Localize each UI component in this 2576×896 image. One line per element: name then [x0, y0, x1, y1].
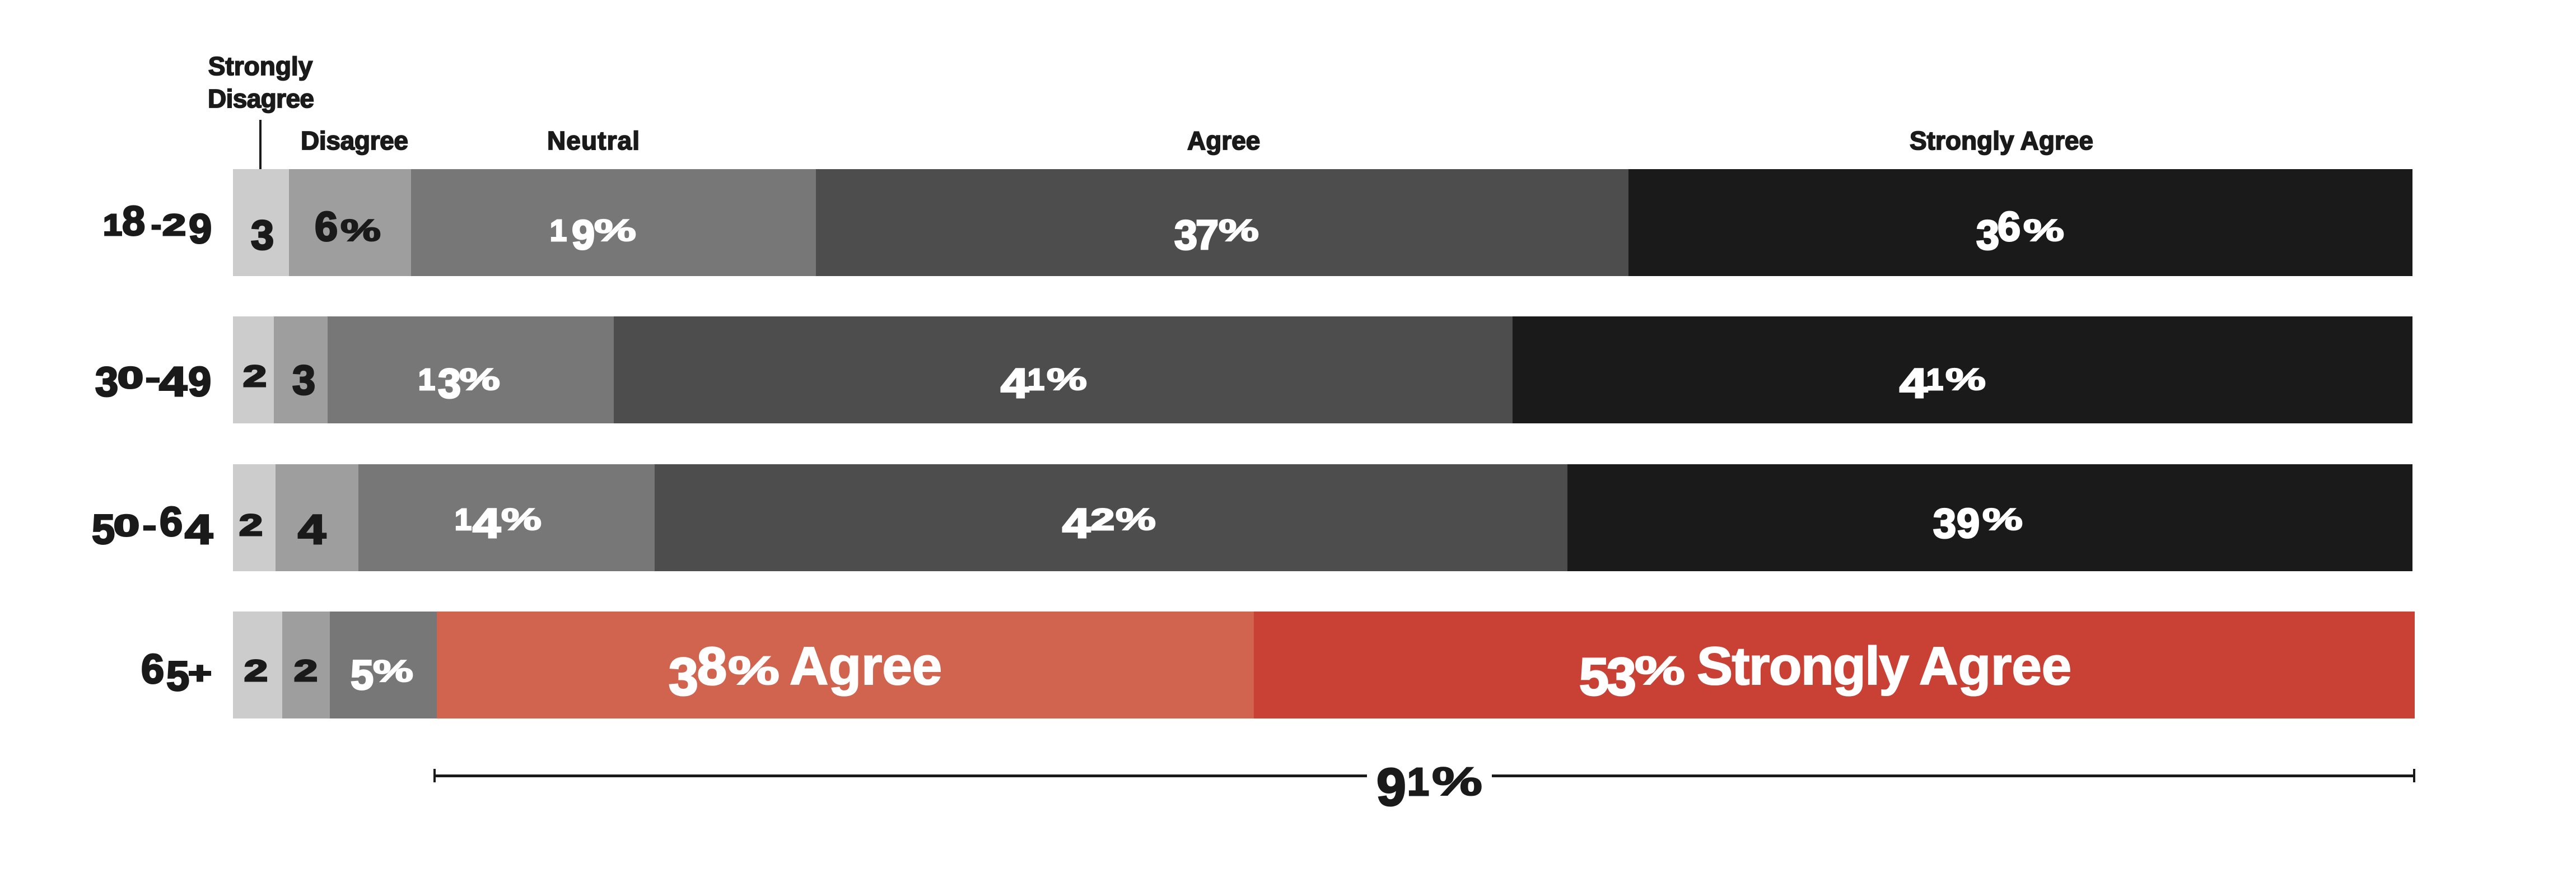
value 19%: 1 [550, 214, 567, 248]
age label 50-64: 6 [160, 498, 183, 545]
value 42%: 2 [1091, 503, 1114, 536]
value 2: 2 [243, 360, 267, 393]
value 36%: % [2023, 213, 2064, 248]
bracket line right [1492, 774, 2415, 777]
value 41%: 1 [1926, 363, 1943, 396]
bracket tick left [433, 769, 436, 782]
value 19%: % [594, 213, 636, 248]
age label 18-29: 2 [162, 208, 186, 242]
age label 50-64: 5 [92, 506, 115, 553]
row: 65+ (highlighted) [141, 612, 2415, 718]
age label 30-49: 4 [159, 358, 187, 405]
segment: neutral 5% [330, 612, 437, 718]
segment: strongly agree 53% [1254, 612, 2415, 718]
heading: neutral: Neutral [547, 126, 640, 155]
segment: disagree 4 [276, 464, 358, 571]
age label 18-29: 9 [189, 206, 212, 252]
value 39%: % [1982, 502, 2023, 536]
value 13%: % [459, 362, 500, 396]
value 41%: 1 [1028, 363, 1044, 396]
value 13%: 1 [418, 363, 435, 396]
segment: strongly disagree 2 [233, 316, 274, 423]
segment: strongly agree 41% [1513, 316, 2412, 423]
value 53% Strongly Agree: Agree [1919, 636, 2071, 696]
value 14%: 1 [455, 503, 472, 536]
value 2: 2 [294, 654, 318, 688]
value 5%: 5 [351, 652, 374, 698]
age label 18-29: 8 [122, 198, 145, 244]
value 13%: 3 [438, 360, 461, 407]
value 37%: 3 [1174, 212, 1197, 258]
segment: strongly disagree 2 [233, 464, 276, 571]
value 2: 2 [239, 508, 263, 542]
value 41%: 4 [1001, 360, 1029, 407]
age label 50-64: 4 [185, 506, 213, 553]
column headings [208, 52, 2093, 170]
heading: agree: Agree [1187, 126, 1260, 155]
segment: strongly agree 36% [1628, 169, 2412, 276]
value 38% Agree: Agree [790, 636, 942, 696]
segment: strongly agree 39% [1567, 464, 2412, 571]
total 91%: 9 [1376, 758, 1406, 817]
segment: agree 37% [816, 169, 1628, 276]
value 53% Strongly Agree: % [1635, 649, 1685, 693]
value 3: 3 [251, 212, 274, 258]
bracket line left [434, 774, 1367, 777]
value 5%: % [373, 654, 413, 688]
value 37%: % [1219, 213, 1259, 248]
value 36%: 6 [1998, 203, 2020, 250]
heading: strongly disagree: Disagree [208, 84, 314, 113]
row: 50-64 [92, 464, 2412, 571]
segment: disagree 6% [289, 169, 411, 276]
value 39%: 9 [1957, 500, 1980, 547]
value 42%: % [1116, 502, 1156, 536]
bracket tick right [2413, 769, 2415, 782]
segment: agree 41% [614, 316, 1513, 423]
segment: neutral 19% [411, 169, 816, 276]
age label 50-64: 0 [114, 509, 139, 543]
value 41%: % [1945, 362, 1986, 396]
age label 65+: + [188, 656, 212, 690]
value 36%: 3 [1976, 212, 1999, 258]
age label 30-49: - [146, 361, 160, 395]
segment: strongly disagree 3 [233, 169, 289, 276]
age label 30-49: 3 [95, 358, 118, 405]
row: 30-49 [95, 316, 2412, 423]
value 14%: 4 [473, 500, 501, 547]
value 41%: 4 [1900, 360, 1928, 407]
value 38% Agree: % [728, 649, 780, 693]
age label 30-49: 9 [188, 358, 211, 405]
heading: strongly disagree: Strongly [208, 52, 313, 81]
value 53% Strongly Agree: Strongly [1697, 636, 1908, 696]
total 91%: 1 [1407, 760, 1429, 804]
segment: disagree 3 [274, 316, 328, 423]
value 42%: 4 [1062, 500, 1090, 547]
value 6%: % [340, 213, 381, 248]
leader line: strongly disagree [259, 120, 262, 170]
age label 18-29: 1 [103, 208, 122, 242]
age label 65+: 5 [166, 653, 189, 699]
value 41%: % [1047, 362, 1087, 396]
value 2: 2 [244, 654, 268, 688]
segment: agree 38% [437, 612, 1254, 718]
value 3: 3 [292, 357, 315, 403]
heading: disagree: Disagree [301, 126, 408, 155]
age label 65+: 6 [141, 646, 164, 692]
segment: neutral 14% [358, 464, 655, 571]
value 53% Strongly Agree: 3 [1607, 647, 1636, 707]
segment: neutral 13% [328, 316, 614, 423]
heading: strongly agree: Strongly Agree [1910, 126, 2093, 155]
value 39%: 3 [1933, 500, 1956, 547]
segment: disagree 2 [282, 612, 330, 718]
value 53% Strongly Agree: 5 [1579, 647, 1609, 707]
row: 18-29 [103, 169, 2412, 276]
value 4: 4 [298, 506, 326, 553]
value 37%: 7 [1196, 212, 1219, 258]
value 19%: 9 [572, 212, 595, 258]
segment: agree 42% [655, 464, 1567, 571]
age label 30-49: 0 [118, 361, 143, 395]
segment: strongly disagree 2 [233, 612, 282, 718]
bracket: 91% total agree [433, 758, 2415, 817]
total 91%: % [1432, 760, 1482, 804]
value 6%: 6 [315, 203, 338, 250]
age label 18-29: - [151, 208, 161, 242]
value 38% Agree: 8 [697, 637, 727, 696]
value 38% Agree: 3 [669, 647, 698, 707]
value 14%: % [501, 502, 542, 536]
age label 50-64: - [143, 509, 156, 543]
